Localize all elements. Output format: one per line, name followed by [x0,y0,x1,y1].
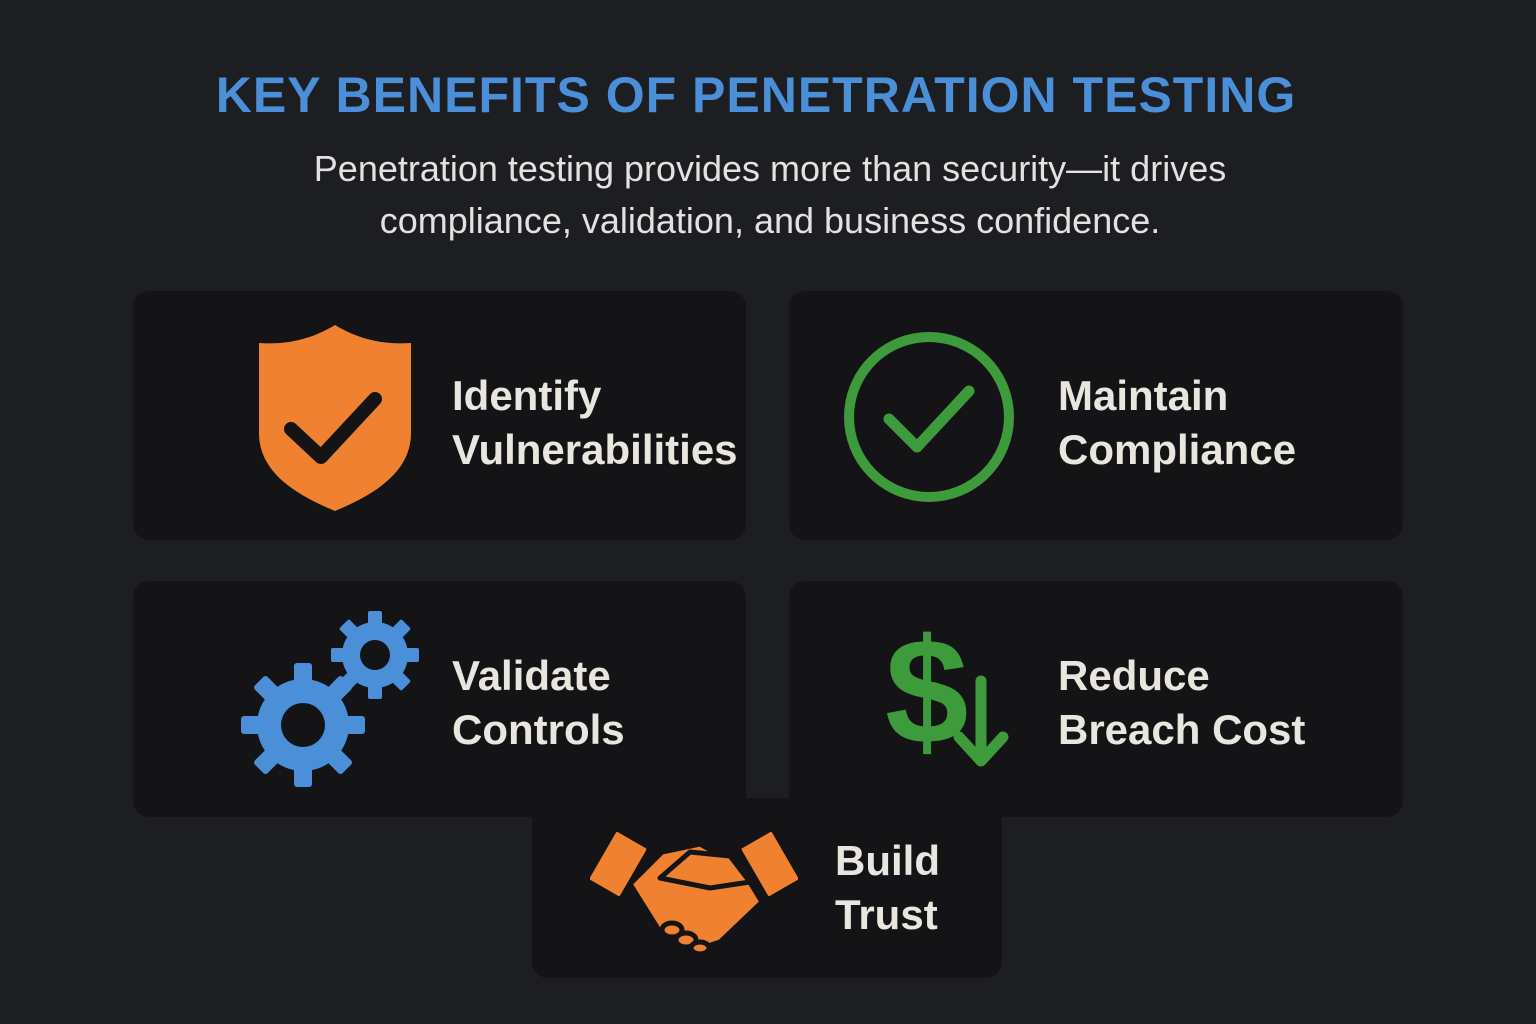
label: Trust [835,891,938,938]
panel: validate controls [133,581,746,817]
panel: identify vulnerabilities [133,291,746,540]
icon: handshake [590,832,798,952]
subtitle: Penetration testing provides more than security—it drives [314,148,1226,189]
subtitle [314,148,1226,241]
panel: reduce breach cost [789,581,1403,817]
label: Reduce [1058,652,1210,699]
icon: shield [259,325,411,511]
label: Build [835,837,940,884]
label [1058,372,1296,473]
label [452,652,625,753]
label [452,372,738,473]
label: Maintain [1058,372,1228,419]
label: Controls [452,706,625,753]
label: Breach Cost [1058,706,1305,753]
label: Vulnerabilities [452,426,738,473]
label [1058,652,1305,753]
icon: dollar down [885,609,1008,775]
icon: gears [241,611,419,787]
icon: dollar down: $ [885,609,968,775]
panel: build trust [532,798,1002,978]
panel: maintain compliance [789,291,1403,540]
title: KEY BENEFITS OF PENETRATION TESTING [216,67,1296,123]
label: Compliance [1058,426,1296,473]
icon: check circle [844,332,1014,502]
label [835,837,940,938]
subtitle: compliance, validation, and business confidence. [380,200,1160,241]
label: Identify [452,372,601,419]
label: Validate [452,652,611,699]
